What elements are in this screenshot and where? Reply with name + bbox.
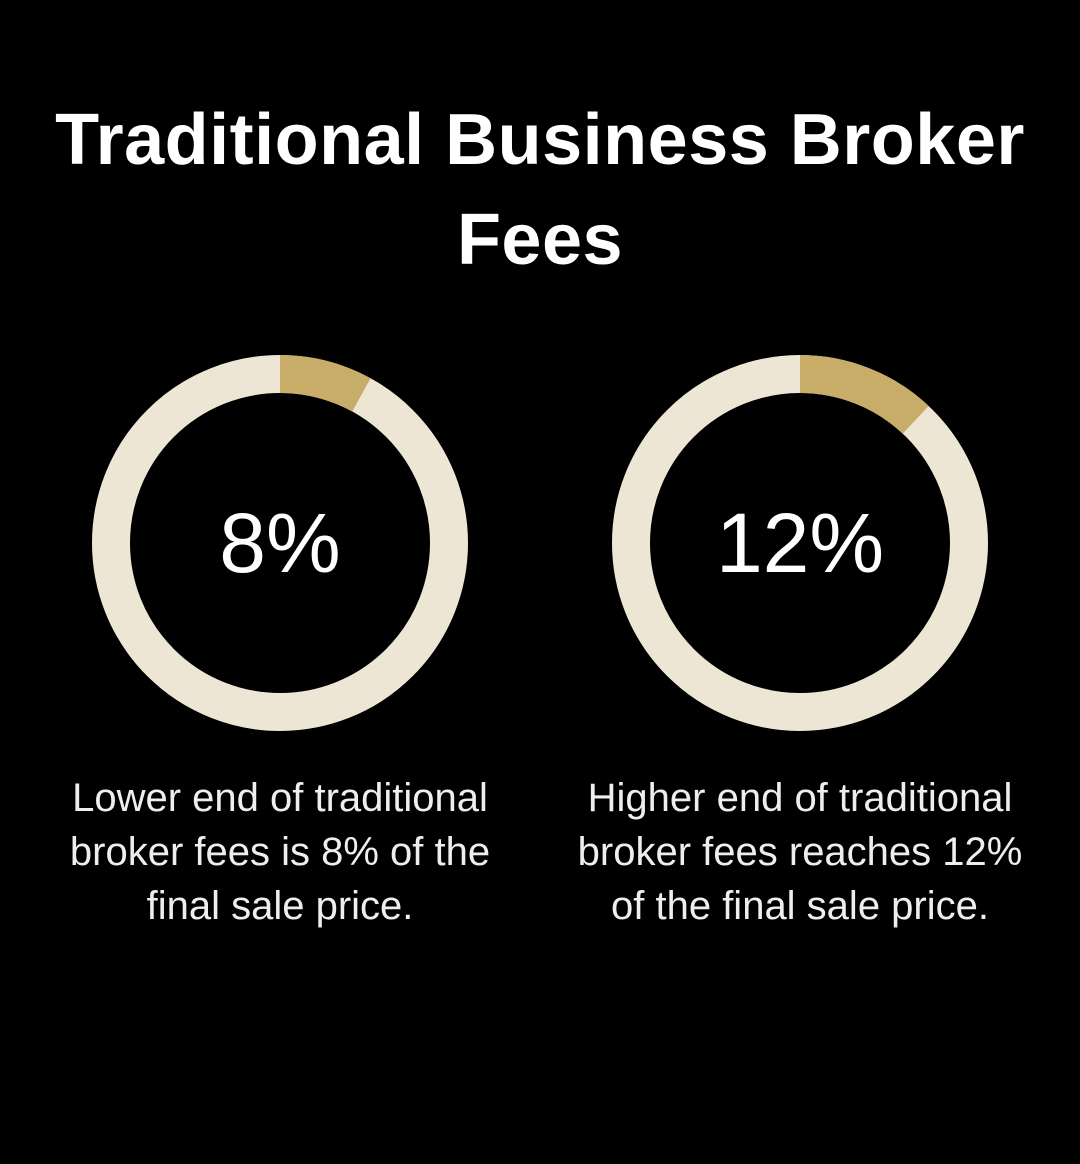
donut chart: 12%	[612, 355, 988, 731]
title	[55, 100, 1025, 280]
donut chart: 8%: 8%	[219, 496, 341, 590]
title: Traditional Business Broker	[55, 100, 1025, 180]
caption: lower end	[70, 776, 490, 928]
caption: lower end: final sale price.	[147, 884, 413, 928]
caption: higher end: Higher end of traditional	[588, 776, 1012, 820]
caption: lower end: broker fees is 8% of the	[70, 830, 490, 874]
title: Fees	[457, 200, 623, 280]
caption: higher end: of the final sale price.	[611, 884, 989, 928]
caption: higher end	[578, 776, 1022, 928]
donut chart: 8%	[92, 355, 468, 731]
caption: higher end: broker fees reaches 12%	[578, 830, 1022, 874]
donut chart: 12%: 12%	[716, 496, 884, 590]
caption: lower end: Lower end of traditional	[72, 776, 488, 820]
